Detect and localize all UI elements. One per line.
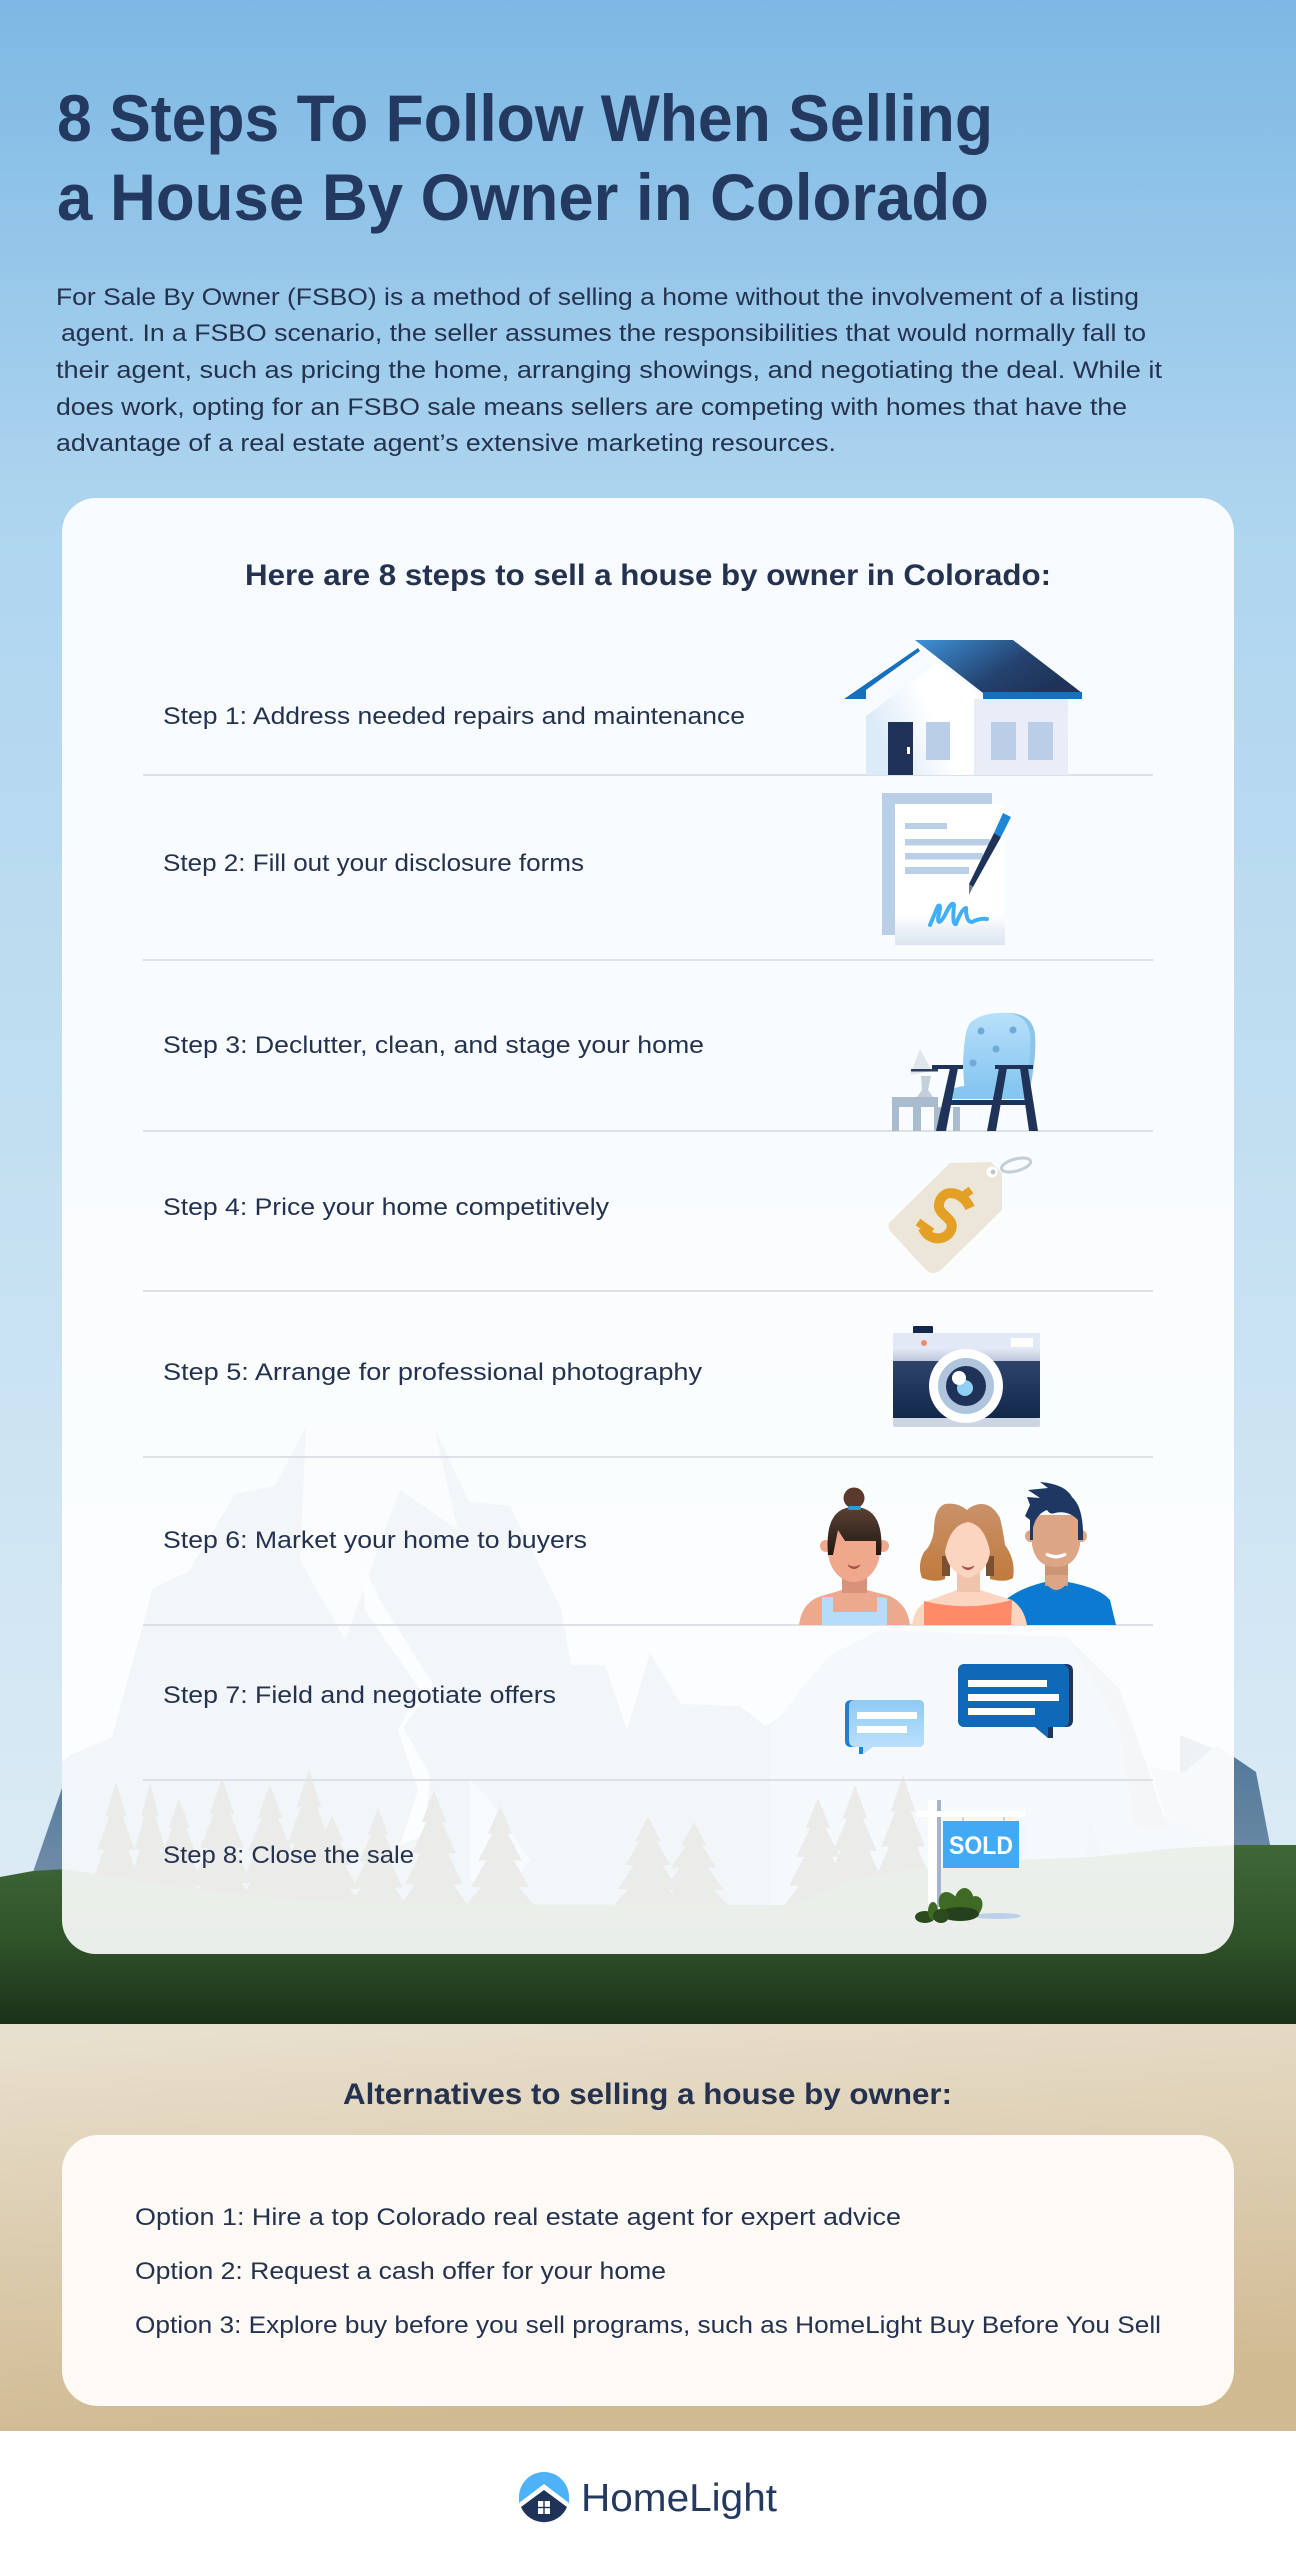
wordmark: HomeLight [581, 2477, 777, 2520]
icon: three people [799, 1482, 1116, 1625]
sky background [0, 0, 1296, 1900]
alternatives card [62, 2135, 1234, 2406]
option 3: Option 3: Explore buy before you sell programs, such as HomeLight Buy Before You Sell [135, 2312, 1161, 2339]
icon: sold sign [915, 1800, 1025, 1924]
step 3 text: Step 3: Declutter, clean, and stage your home [163, 1032, 704, 1059]
step 6 text: Step 6: Market your home to buyers [163, 1527, 587, 1554]
icon: speech bubbles [845, 1664, 1073, 1754]
intro paragraph: For Sale By Owner (FSBO) is a method of selling a home without the involvement of a listing [56, 284, 1139, 311]
title: a House By Owner in Colorado [57, 160, 989, 234]
panel: alternatives section [0, 2024, 1296, 2431]
pine trees behind the panel [88, 1769, 936, 1905]
green hill [0, 1845, 1296, 2024]
panel heading: Here are 8 steps to sell a house by owner in Colorado: [245, 559, 1051, 592]
icon: armchair and side table [892, 1013, 1038, 1131]
intro paragraph: does work, opting for an FSBO sale means sellers are competing with homes that have the [56, 394, 1127, 421]
option 1: Option 1: Hire a top Colorado real estate agent for expert advice [135, 2204, 901, 2231]
step 8 text: Step 8: Close the sale [163, 1842, 414, 1869]
alternatives heading: Alternatives to selling a house by owner: [343, 2078, 952, 2111]
mountains behind the panel [33, 1427, 1275, 1910]
icon: sold sign: SOLD [949, 1832, 1013, 1860]
option 2: Option 2: Request a cash offer for your home [135, 2258, 666, 2285]
step 2 text: Step 2: Fill out your disclosure forms [163, 850, 584, 877]
intro paragraph: their agent, such as pricing the home, arranging showings, and negotiating the deal. While it [56, 357, 1162, 384]
intro paragraph: agent. In a FSBO scenario, the seller assumes the responsibilities that would normally fall to [61, 320, 1146, 347]
step 5 text: Step 5: Arrange for professional photography [163, 1359, 702, 1386]
title [57, 81, 993, 234]
icon: camera [893, 1326, 1040, 1427]
panel: steps card [62, 498, 1234, 1954]
intro paragraph: advantage of a real estate agent’s extensive marketing resources. [56, 430, 836, 457]
step 7 text: Step 7: Field and negotiate offers [163, 1682, 556, 1709]
step 4 text: Step 4: Price your home competitively [163, 1194, 609, 1221]
HomeLight logo [519, 2472, 777, 2522]
icon: logo mark [519, 2472, 569, 2522]
icon: signed document [882, 793, 1011, 945]
icon: house [844, 640, 1082, 775]
intro paragraph [56, 284, 1162, 457]
icon: price tag [888, 1155, 1032, 1273]
title: 8 Steps To Follow When Selling [57, 81, 993, 155]
step 1 text: Step 1: Address needed repairs and maintenance [163, 703, 745, 730]
footer background [0, 2431, 1296, 2560]
